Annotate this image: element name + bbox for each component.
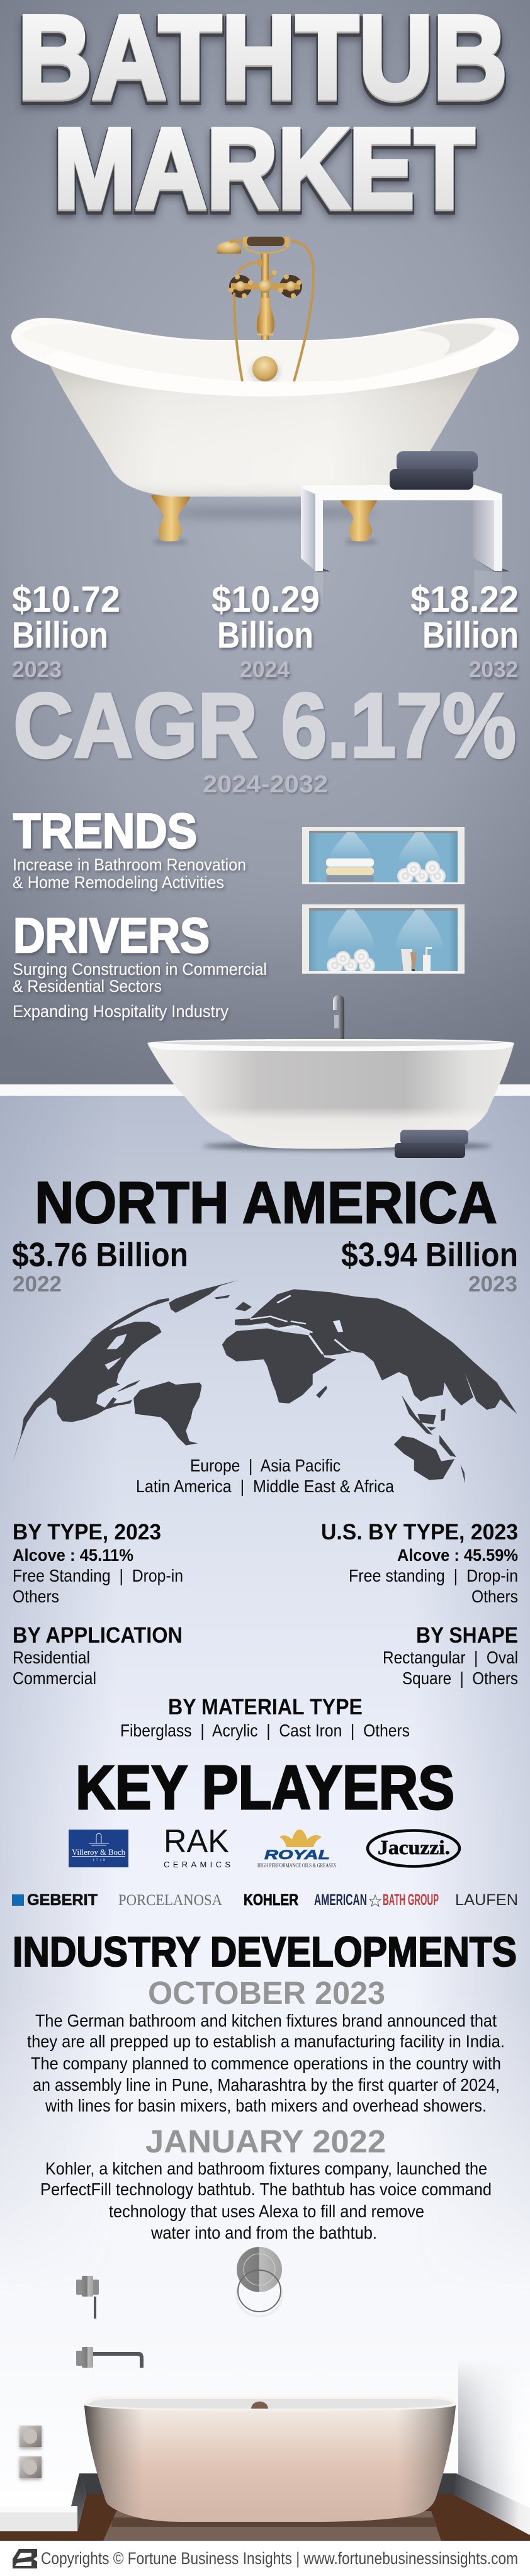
icon: gold shower mixer bbox=[217, 237, 313, 384]
stat: 2024 market value: 2024 bbox=[240, 656, 290, 682]
map: Eurasia bbox=[235, 1289, 517, 1414]
icon: bath overflow drain with ring bbox=[237, 2247, 282, 2316]
icon: left gold foot bbox=[151, 488, 191, 541]
chart: world map bbox=[13, 1280, 517, 1483]
bathtub inner bbox=[88, 2399, 453, 2409]
stat: 2023 market value bbox=[12, 579, 120, 682]
tub body bbox=[148, 1045, 514, 1149]
panel: U.S. by type: Free standing | Drop-in bbox=[349, 1566, 518, 1585]
panel: by shape bbox=[383, 1623, 518, 1688]
stat: North America 2023 bbox=[341, 1236, 518, 1296]
text: other regions: Latin America | Middle East & Africa bbox=[136, 1476, 395, 1496]
icon: wall tap lever bbox=[76, 2276, 99, 2319]
map: Africa bbox=[222, 1329, 336, 1403]
icon: upper folded towel bbox=[397, 451, 478, 472]
illustration: shelf niche with towels bbox=[302, 827, 465, 884]
logo: Jacuzzi: Jacuzzi. bbox=[378, 1836, 450, 1859]
panel: by material type: Fiberglass | Acrylic | Cast Iron | Others bbox=[120, 1721, 410, 1740]
panel: by material type bbox=[120, 1695, 410, 1740]
text: January 2022 body bbox=[40, 2159, 492, 2242]
floor bbox=[0, 2494, 530, 2541]
text: January 2022 body: PerfectFill technology bathtub. The bathtub has voice command bbox=[40, 2179, 492, 2199]
map: Australia bbox=[394, 1436, 454, 1480]
logo: Jacuzzi bbox=[368, 1830, 460, 1867]
text: other regions bbox=[136, 1456, 395, 1496]
logo: Porcelanosa: PORCELANOSA bbox=[118, 1892, 222, 1909]
map: Greenland bbox=[169, 1280, 239, 1313]
panel: wall background bbox=[0, 0, 530, 1086]
icon: lower folded towel bbox=[390, 469, 473, 490]
stat: North America 2022: 2022 bbox=[13, 1272, 62, 1296]
icon: wall sockets bbox=[20, 2426, 42, 2478]
logo: Geberit: GEBERIT bbox=[27, 1891, 98, 1909]
stat: 2032 market value: 2032 bbox=[469, 656, 518, 682]
icon: rolled towels bbox=[397, 860, 446, 884]
panel: October 2023 development bbox=[27, 1975, 505, 2115]
panel: by shape: Square | Others bbox=[402, 1668, 518, 1688]
icon: chrome floor faucet bbox=[333, 995, 344, 1040]
tub front lip bbox=[45, 330, 519, 397]
panel: U.S. by type bbox=[321, 1520, 518, 1606]
logo: Villeroy & Boch: Villeroy & Boch bbox=[72, 1847, 125, 1857]
heading: January 2022: JANUARY 2022 bbox=[145, 2123, 386, 2159]
stool left leg bbox=[315, 497, 323, 571]
stat: North America 2022 bbox=[12, 1236, 188, 1296]
illustration: clawfoot bathtub with gold fixtures bbox=[11, 237, 519, 544]
floor reflection bbox=[103, 2511, 441, 2541]
text: January 2022 body: Kohler, a kitchen and bathroom fixtures company, launched the bbox=[45, 2159, 487, 2178]
panel: by application: BY APPLICATION bbox=[13, 1623, 183, 1648]
map: North America bbox=[13, 1322, 162, 1462]
panel: drivers: Expanding Hospitality Industry bbox=[13, 1002, 229, 1021]
panel: by shape: BY SHAPE bbox=[416, 1623, 518, 1648]
panel: drivers bbox=[13, 908, 267, 1021]
illustration: freestanding white bathtub bbox=[147, 995, 514, 1158]
map: Iceland bbox=[215, 1295, 230, 1299]
icon: rolled towels bbox=[327, 949, 375, 974]
baseboard bbox=[0, 1084, 530, 1096]
map: inland seas bbox=[240, 1295, 348, 1354]
heading: drivers: DRIVERS bbox=[13, 908, 210, 963]
icon: wall spout bbox=[76, 2347, 144, 2368]
illustration: shelf niche with toiletries bbox=[302, 904, 465, 974]
text: October 2023 body: The company planned to commence operations in the country with bbox=[31, 2054, 501, 2073]
logo: RAK Ceramics: RAK bbox=[164, 1823, 229, 1860]
icon: lower dark towel bbox=[395, 1143, 465, 1158]
panel: by material type: BY MATERIAL TYPE bbox=[168, 1695, 363, 1719]
stat: 2023 market value: Billion bbox=[12, 615, 108, 656]
logo: American Bath Group: AMERICAN bbox=[314, 1891, 367, 1909]
logo: Royal: ROYAL bbox=[264, 1848, 330, 1862]
map: South America bbox=[133, 1381, 202, 1446]
icon: cosmetic tubes and pump bottle bbox=[401, 947, 432, 972]
map: British Isles bbox=[235, 1302, 252, 1311]
text: January 2022 body: water into and from the bathtub. bbox=[150, 2223, 377, 2242]
text: driver items: Surging Construction in Commercial bbox=[13, 960, 267, 979]
icon: folded towel stack bbox=[326, 858, 374, 882]
logo: RAK Ceramics: CERAMICS bbox=[164, 1860, 230, 1869]
right wall bbox=[458, 2366, 511, 2499]
panel: drivers: & Residential Sectors bbox=[13, 977, 162, 996]
panel: January 2022 development bbox=[40, 2123, 492, 2242]
panel: U.S. by type: Alcove : 45.59% bbox=[397, 1546, 518, 1565]
map: Caspian sea bbox=[333, 1320, 343, 1332]
stool leg shadows bbox=[301, 558, 510, 571]
text: October 2023 body: The German bathroom and kitchen fixtures brand announced that bbox=[35, 2011, 497, 2030]
map: Arctic islands bbox=[89, 1298, 169, 1341]
text: other regions: Europe | Asia Pacific bbox=[190, 1456, 341, 1475]
tub rim bbox=[147, 1039, 514, 1051]
tub rim bbox=[11, 318, 519, 397]
logo: Laufen: LAUFEN bbox=[455, 1891, 518, 1909]
illustration: bottom bathroom scene bbox=[0, 2247, 530, 2541]
map: New Zealand bbox=[460, 1465, 465, 1483]
icon: Fortune Business Insights logo bbox=[13, 2549, 37, 2568]
stat: North America 2023: 2023 bbox=[468, 1272, 517, 1296]
skirting: back wall bbox=[79, 2473, 456, 2494]
heading: trends: TRENDS bbox=[13, 803, 197, 858]
bathtub body bbox=[84, 2397, 456, 2522]
stool right leg bbox=[494, 497, 502, 571]
footer bbox=[0, 2541, 530, 2576]
panel: by type: Alcove : 45.11% bbox=[13, 1546, 133, 1565]
logo: Villeroy & Boch bbox=[69, 1830, 128, 1867]
tub body bbox=[49, 364, 482, 497]
title bbox=[18, 0, 507, 232]
icon: upper dark towel bbox=[400, 1130, 468, 1145]
stool right leg inner face bbox=[473, 500, 494, 571]
panel: by type: Others bbox=[13, 1587, 59, 1606]
logo: American Bath Group bbox=[314, 1891, 439, 1909]
stat: 2032 market value bbox=[410, 579, 519, 682]
panel: trends bbox=[13, 803, 246, 892]
logo: American Bath Group: BATH GROUP bbox=[383, 1891, 439, 1909]
panel: U.S. by type: Others bbox=[471, 1587, 518, 1606]
text: October 2023 body: with lines for basin mixers, bath mixers and overhead showers. bbox=[45, 2096, 487, 2115]
panel: by application: Commercial bbox=[13, 1668, 96, 1688]
tub floor shadow bbox=[164, 507, 378, 519]
logo: Kohler: KOHLER bbox=[244, 1891, 298, 1909]
panel: by type bbox=[13, 1520, 183, 1606]
stool reflection bbox=[314, 570, 502, 604]
text: January 2022 body: technology that uses Alexa to fill and remove bbox=[109, 2202, 424, 2221]
panel: trends: & Home Remodeling Activities bbox=[13, 873, 224, 892]
skirting: right bbox=[453, 2473, 530, 2535]
logo: Royal bbox=[257, 1830, 336, 1869]
stat: CAGR period: 2024-2032 bbox=[203, 771, 328, 798]
stat: 2024 market value: Billion bbox=[217, 615, 313, 656]
panel: by application: Residential bbox=[13, 1648, 90, 1667]
logo: Villeroy & Boch: 1748 bbox=[93, 1859, 105, 1862]
title line: Market: MARKET bbox=[54, 105, 475, 232]
stat: 2023 market value: $10.72 bbox=[12, 579, 120, 620]
stool seat bbox=[302, 485, 502, 500]
tub shadow bbox=[203, 1142, 492, 1150]
stat: North America 2022: $3.76 Billion bbox=[12, 1236, 188, 1274]
icon: right gold foot bbox=[341, 500, 377, 541]
map: Caribbean bbox=[116, 1380, 140, 1392]
heading: North America: NORTH AMERICA bbox=[35, 1169, 497, 1235]
panel: by type: Free Standing | Drop-in bbox=[13, 1566, 183, 1585]
logo: Royal: HIGH PERFORMANCE OILS & GREASES bbox=[257, 1862, 336, 1869]
panel: by application bbox=[13, 1623, 183, 1688]
panel: floor background bbox=[0, 1096, 530, 2326]
text: trends item: Increase in Bathroom Renovation bbox=[13, 855, 246, 874]
text: October 2023 body: they are all prepped up to establish a manufacturing facility in India. bbox=[27, 2032, 505, 2051]
stat: 2032 market value: $18.22 bbox=[410, 579, 519, 620]
stat: 2024 market value bbox=[211, 579, 320, 682]
stat: 2023 market value: 2023 bbox=[12, 656, 62, 682]
bathtub overflow bbox=[251, 2402, 268, 2409]
bathtub rim bbox=[84, 2397, 456, 2410]
stool left leg side bbox=[301, 488, 315, 571]
heading: October 2023: OCTOBER 2023 bbox=[148, 1975, 385, 2011]
tub inner wall bbox=[21, 322, 496, 382]
foot shadows bbox=[154, 540, 376, 544]
stat: 2024 market value: $10.29 bbox=[211, 579, 320, 620]
map: Southeast Asia islands bbox=[402, 1395, 456, 1457]
skirting: left bbox=[0, 2473, 86, 2531]
panel: by type: BY TYPE, 2023 bbox=[13, 1520, 161, 1544]
text: October 2023 body bbox=[27, 2011, 505, 2115]
illustration: stool with towels bbox=[301, 451, 510, 604]
panel: U.S. by type: U.S. BY TYPE, 2023 bbox=[321, 1520, 518, 1544]
map: Madagascar bbox=[316, 1386, 327, 1398]
text: October 2023 body: an assembly line in Pune, Maharashtra by the first quarter of 2024, bbox=[33, 2075, 500, 2095]
heading: key players: KEY PLAYERS bbox=[76, 1753, 454, 1822]
